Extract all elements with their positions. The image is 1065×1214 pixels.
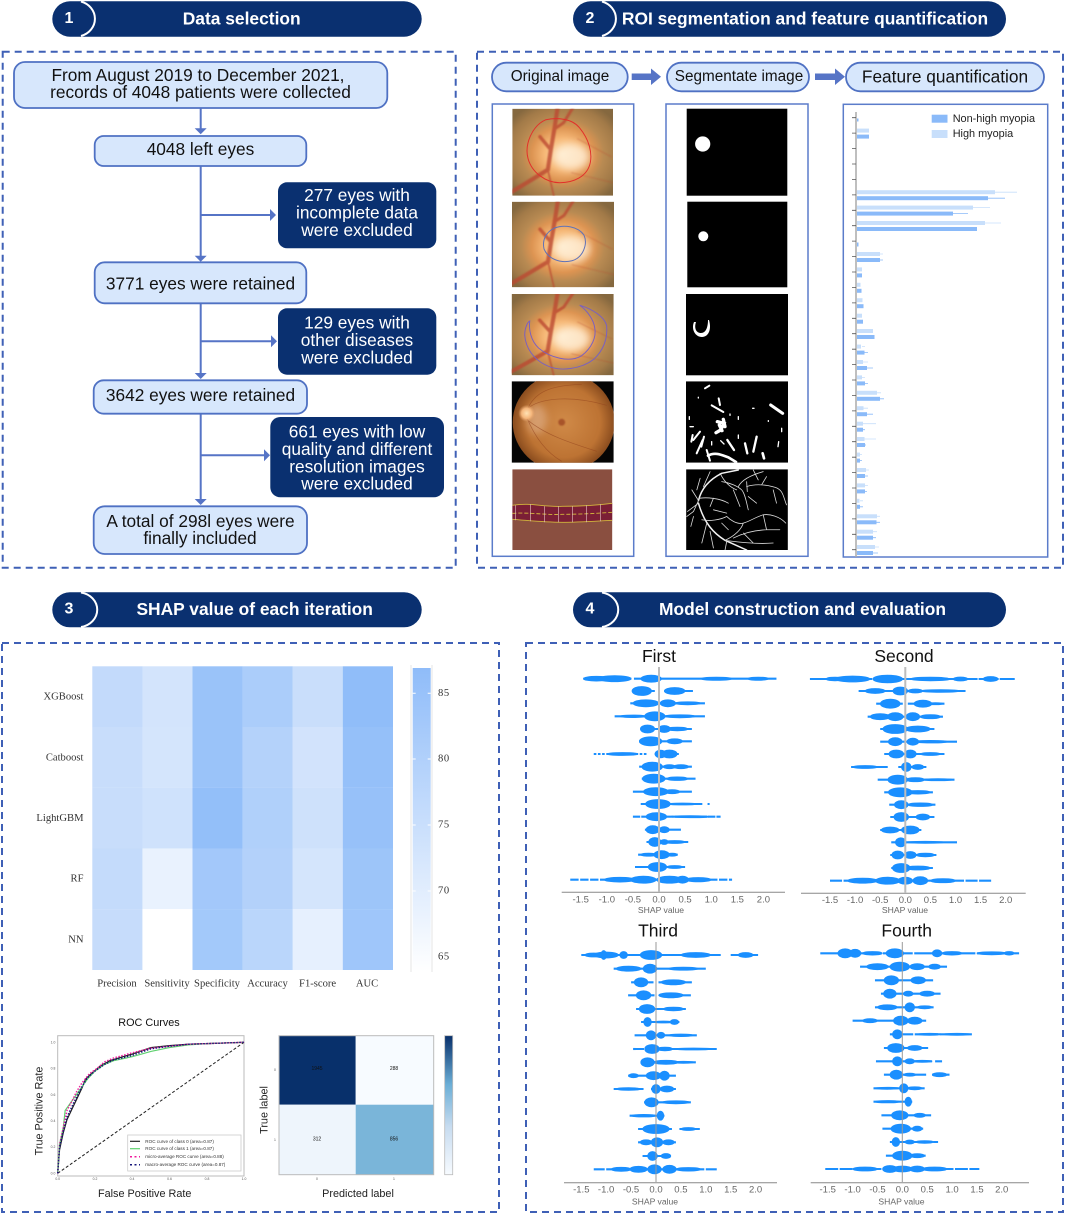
chart: First SHAP plot: -0.5 [625, 894, 641, 906]
row labels: RF [71, 874, 84, 884]
header: 1 Data selection: Data selection [183, 8, 301, 28]
ROC legend: macro-average ROC curve (area=0.87) [145, 1162, 226, 1167]
ROC legend: micro-average ROC curve (area=0.88) [145, 1154, 224, 1159]
axis and ticks [855, 112, 857, 557]
error bars [860, 192, 1017, 553]
bars: non-high myopia [857, 118, 988, 555]
header: 4 Model construction and evaluation: Model construction and evaluation [659, 599, 946, 619]
panel: data selection flowchart [3, 52, 456, 568]
legend: High myopia [953, 128, 1014, 140]
column labels [97, 978, 378, 990]
pill: Segmentate image [667, 63, 809, 91]
ROC legend: ROC curve of class 0 (area=0.87) [145, 1139, 214, 1144]
chart: Third SHAP plot: -1.0 [598, 1184, 614, 1196]
legend: Non-high myopia [953, 113, 1036, 125]
chart: Second SHAP plot [801, 646, 1026, 915]
confusion matrix colorbar [445, 1036, 453, 1175]
chart: Third SHAP plot: 1.5 [724, 1184, 737, 1196]
chart: Third SHAP plot [564, 921, 777, 1207]
row labels [36, 692, 84, 946]
box: 129 excluded: were excluded [300, 348, 413, 368]
panel: segmentation masks [666, 104, 808, 556]
box: 661 excluded: resolution images [289, 456, 425, 476]
chart: Fourth SHAP plot: 0.0 [896, 1184, 909, 1196]
bars: high myopia [857, 129, 995, 549]
confusion matrix: 312 [313, 1136, 321, 1142]
mask: lesions [686, 381, 788, 463]
chart: Fourth SHAP plot: -1.5 [820, 1184, 836, 1196]
tick labels: 0.8 [205, 1177, 209, 1181]
pill: Original image: Original image [511, 68, 609, 85]
row labels: Catboost [46, 752, 84, 764]
box: 129 excluded: other diseases [301, 330, 414, 350]
column labels: AUC [356, 978, 378, 990]
box: 3771 retained [95, 262, 306, 303]
row labels: NN [68, 934, 84, 946]
column labels: Precision [97, 978, 137, 990]
header: 1 Data selection [52, 1, 422, 37]
chart: Second SHAP plot: SHAP value [882, 905, 928, 915]
image: peripapillary atrophy contour [512, 294, 614, 376]
pill: Feature quantification: Feature quantification [862, 66, 1028, 86]
column labels: Specificity [194, 978, 241, 990]
chart: Fourth SHAP plot [811, 921, 1029, 1207]
tick labels: 0.2 [93, 1177, 97, 1181]
chart: First SHAP plot: 0.5 [678, 894, 692, 906]
mask: optic cup [687, 202, 787, 287]
tick labels: 0.0 [55, 1177, 60, 1181]
ROC curves chart: True Positive Rate [34, 1067, 46, 1155]
chart: Second SHAP plot: 2.0 [999, 895, 1012, 906]
chart: Third SHAP plot: -0.5 [623, 1184, 639, 1196]
chart: First SHAP plot [562, 646, 785, 915]
confusion matrix: 1 [274, 1138, 276, 1142]
box: 129 excluded [278, 308, 436, 375]
confusion matrix: Predicted label [322, 1188, 394, 1200]
box: 277 excluded: incomplete data [296, 202, 418, 222]
row labels: XGBoost [43, 692, 84, 702]
column labels: Sensitivity [144, 978, 190, 990]
chart: First SHAP plot: -1.0 [599, 894, 615, 906]
box: final 2981 included: finally included [143, 528, 257, 548]
image: fundus photograph [512, 381, 614, 463]
panel: feature bar chart [843, 104, 1048, 557]
header: 2 ROI segmentation and feature quantification: ROI segmentation and feature quantification [622, 8, 988, 28]
confusion matrix: True label [259, 1086, 271, 1134]
tick labels: 0.6 [167, 1177, 172, 1181]
tick labels: 0.4 [130, 1177, 134, 1181]
header: 4 Model construction and evaluation [573, 592, 1006, 627]
box: 129 excluded: 129 eyes with [304, 312, 410, 332]
panel: model performance [2, 643, 499, 1212]
box: records collected: records of 4048 patients were collected [50, 82, 351, 102]
column labels: F1-score [299, 978, 336, 990]
tick labels: 1.0 [51, 1040, 55, 1044]
pill: Original image [492, 63, 628, 91]
chart: Second SHAP plot: Second [874, 646, 934, 666]
confusion matrix: 288 [390, 1066, 398, 1072]
chart: Fourth SHAP plot: 1.0 [945, 1184, 959, 1196]
box: 277 excluded [278, 182, 436, 248]
box: 277 excluded: were excluded [300, 220, 413, 240]
chart: First SHAP plot: 1.5 [731, 894, 744, 906]
tick labels [51, 1040, 246, 1181]
chart: First SHAP plot: 2.0 [757, 894, 770, 906]
ROC curves chart: False Positive Rate [98, 1188, 191, 1200]
heatmap cells [92, 666, 393, 970]
box: final 2981 included [94, 506, 307, 554]
heatmap colorbar: 85 [438, 688, 450, 699]
heatmap colorbar: 65 [438, 952, 450, 962]
legend [932, 113, 1036, 140]
chart: Second SHAP plot: 0.5 [924, 895, 937, 906]
confusion matrix: 0 [274, 1068, 276, 1072]
ROC legend: ROC curve of class 1 (area=0.87) [145, 1146, 214, 1151]
box: 4048 left eyes: 4048 left eyes [147, 139, 255, 159]
pill: Feature quantification [846, 63, 1044, 91]
box: final 2981 included: A total of 298l eyes were [106, 511, 295, 531]
ROC curves chart: ROC Curves [118, 1017, 180, 1029]
chart: Third SHAP plot: 0.5 [674, 1184, 688, 1196]
chart: Second SHAP plot: 1.5 [974, 895, 987, 906]
header: 3 SHAP value of each iteration: 3 [65, 600, 74, 618]
chart: First SHAP plot: SHAP value [638, 905, 684, 915]
chart: Fourth SHAP plot: SHAP value [878, 1197, 925, 1207]
confusion matrix: 1 [393, 1177, 395, 1181]
chart: Second SHAP plot: 0.0 [899, 895, 912, 906]
chart: Fourth SHAP plot: 1.5 [970, 1184, 984, 1196]
panel: ROI segmentation and feature quantification [477, 52, 1063, 568]
confusion matrix: 856 [390, 1136, 398, 1142]
header: 3 SHAP value of each iteration: SHAP value of each iteration [136, 599, 373, 619]
box: records collected [14, 62, 387, 108]
box: 277 excluded: 277 eyes with [304, 185, 410, 205]
row labels: LightGBM [36, 813, 84, 824]
ROC legend [128, 1135, 241, 1171]
box: 661 excluded: 661 eyes with low [289, 422, 426, 442]
chart: Third SHAP plot: 1.0 [699, 1184, 712, 1196]
mask: peripapillary atrophy [686, 294, 788, 375]
column labels: Accuracy [247, 978, 288, 990]
header: 2 ROI segmentation and feature quantification: 2 [586, 10, 595, 27]
chart: First SHAP plot: 1.0 [705, 894, 718, 906]
tick labels: 0.0 [51, 1171, 55, 1175]
confusion matrix: 0 [316, 1177, 318, 1181]
chart: Second SHAP plot: 1.0 [949, 895, 962, 906]
pill: Segmentate image: Segmentate image [675, 68, 803, 85]
box: 4048 left eyes [95, 136, 306, 166]
chart: First SHAP plot: -1.5 [573, 894, 589, 906]
panel: original images [492, 104, 634, 556]
chart: Fourth SHAP plot: Fourth [881, 921, 932, 941]
header: 2 ROI segmentation and feature quantification [573, 1, 1006, 37]
chart: Second SHAP plot: -1.5 [822, 895, 838, 906]
chart: Third SHAP plot: -1.5 [573, 1184, 589, 1196]
chart: Fourth SHAP plot: 2.0 [995, 1184, 1008, 1196]
header: 3 SHAP value of each iteration [52, 592, 422, 627]
chart: Fourth SHAP plot: -0.5 [869, 1184, 886, 1196]
image: retinal vessel caliber [512, 469, 612, 550]
mask: vessel tree [686, 469, 788, 550]
heatmap colorbar: 70 [438, 886, 450, 896]
curves [58, 1042, 244, 1173]
mask: optic disc [687, 109, 787, 196]
confusion matrix: 1945 [311, 1066, 323, 1072]
chart: Second SHAP plot: -1.0 [847, 895, 863, 906]
tick labels: 0.8 [51, 1066, 55, 1070]
box: records collected: From August 2019 to December 2021, [52, 65, 344, 85]
flow connectors and arrows [195, 108, 277, 505]
box: 3771 retained: 3771 eyes were retained [106, 274, 295, 294]
box: 3642 retained: 3642 eyes were retained [106, 385, 295, 405]
image: optic cup contour [512, 202, 614, 288]
box: 661 excluded: were excluded [300, 474, 413, 494]
chart: Third SHAP plot: SHAP value [632, 1197, 678, 1207]
heatmap colorbar [411, 665, 450, 972]
box: 661 excluded: quality and different [282, 439, 432, 459]
heatmap colorbar: 80 [438, 754, 450, 764]
box: 3642 retained [94, 380, 307, 414]
tick labels: 1.0 [242, 1177, 246, 1181]
header: 1 Data selection: 1 [65, 10, 74, 27]
heatmap [36, 665, 450, 990]
header: 4 Model construction and evaluation: 4 [586, 600, 595, 618]
tick labels: 0.2 [51, 1145, 55, 1149]
chart: Third SHAP plot: 0.0 [649, 1184, 663, 1196]
chart: Third SHAP plot: 2.0 [749, 1184, 762, 1196]
ROC curves chart [34, 1017, 246, 1200]
image: optic disc contour [512, 108, 613, 196]
box: 661 excluded [270, 417, 444, 497]
tick labels: 0.6 [51, 1093, 55, 1097]
heatmap colorbar: 75 [438, 820, 450, 830]
arrow: segmentate to feature [815, 68, 845, 85]
confusion matrix [259, 1036, 453, 1200]
arrow: original to segmentate [632, 68, 661, 85]
chart: First SHAP plot: 0.0 [652, 894, 666, 906]
tick labels: 0.4 [51, 1119, 55, 1123]
panel: SHAP beeswarm plots [526, 643, 1063, 1212]
chart: Third SHAP plot: Third [638, 921, 678, 941]
chart: Fourth SHAP plot: -1.0 [844, 1184, 861, 1196]
chart: Fourth SHAP plot: 0.5 [921, 1184, 934, 1196]
chart: First SHAP plot: First [642, 646, 676, 666]
chart: Second SHAP plot: -0.5 [872, 895, 888, 906]
